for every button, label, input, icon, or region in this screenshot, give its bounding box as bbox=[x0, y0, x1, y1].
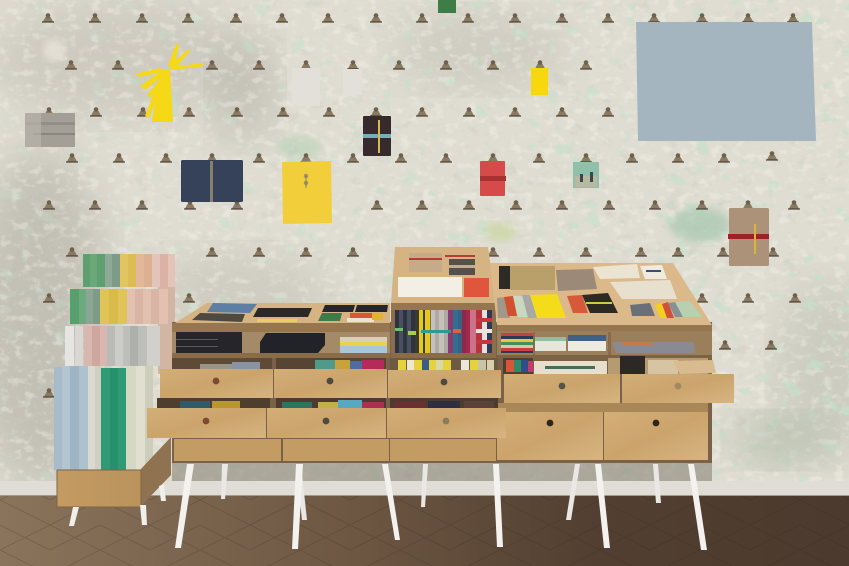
wall clips grid bbox=[42, 13, 801, 398]
lower drawer fronts bbox=[147, 408, 506, 438]
large pale blue board bbox=[636, 22, 816, 141]
upper open drawers interior bbox=[172, 356, 716, 374]
third row of rolls bbox=[65, 326, 160, 366]
pink rolls behind rack bbox=[158, 254, 175, 374]
shadow on the wall below the cabinet bbox=[172, 463, 712, 481]
teal picture card bbox=[573, 162, 599, 188]
yellow paper streamers bbox=[135, 44, 204, 122]
baseboard bbox=[0, 481, 849, 496]
tan notebook with red band bbox=[728, 208, 769, 266]
back legs of the cabinet bbox=[221, 464, 661, 520]
white cards bbox=[292, 68, 362, 106]
middle tray top bbox=[391, 247, 496, 310]
lower left bottom drawer fronts bbox=[174, 439, 496, 461]
left tray top bbox=[172, 303, 390, 332]
left shelf contents bbox=[172, 332, 390, 358]
upper drawer fronts bbox=[160, 369, 734, 403]
rack front panel bbox=[57, 470, 141, 507]
dark blue open folder bbox=[181, 160, 243, 202]
grey photo print bbox=[25, 113, 75, 147]
lower open drawers interior bbox=[157, 398, 498, 408]
cabinet back carcass bbox=[172, 322, 712, 463]
rack legs bbox=[69, 484, 166, 526]
dark brown notebook bbox=[363, 116, 391, 156]
bottom row of rolls bbox=[54, 366, 153, 470]
green card at top edge bbox=[438, 0, 456, 13]
right shelf contents bbox=[497, 331, 712, 359]
middle notebooks column bbox=[391, 310, 496, 358]
yellow envelope bbox=[282, 161, 332, 224]
wrapping paper rack bbox=[54, 254, 175, 526]
main cabinet bbox=[147, 247, 734, 463]
floor: herringbone parquet bbox=[0, 496, 849, 566]
small yellow card bbox=[531, 68, 548, 95]
second row of rolls bbox=[70, 289, 168, 324]
red notebook bbox=[480, 161, 506, 196]
rack side panel bbox=[140, 437, 171, 507]
front legs of the cabinet bbox=[175, 464, 707, 550]
right closed drawers bbox=[497, 403, 708, 460]
top row of rolls bbox=[83, 254, 175, 287]
right tray top bbox=[490, 263, 712, 331]
